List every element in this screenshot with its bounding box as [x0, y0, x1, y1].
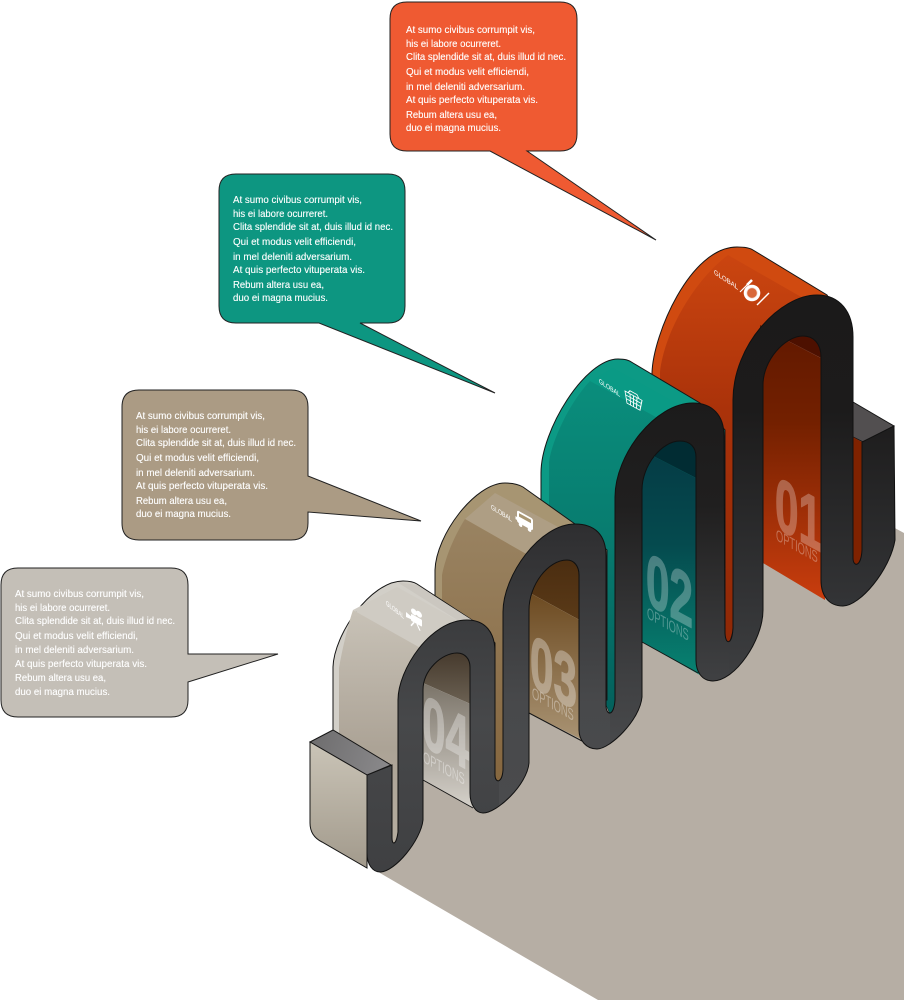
arch 01 options label: OPTIONS: [776, 526, 818, 567]
callout text: duo ei magna mucius.: [15, 686, 110, 698]
icon: bus: [516, 509, 533, 534]
callout shape: [122, 390, 421, 540]
start block top face: [310, 730, 391, 775]
arch 04 grey: [333, 581, 495, 848]
callout text: Rebum altera usu ea,: [15, 672, 106, 684]
arch 01 main surface: [660, 255, 803, 650]
arch 04 highlight band: [353, 587, 462, 655]
callout text: At sumo civibus corrumpit vis,: [15, 588, 144, 600]
callout text: At quis perfecto vituperata vis.: [233, 264, 365, 276]
callout text: At sumo civibus corrumpit vis,: [406, 24, 535, 36]
arch 02 teal: [541, 359, 725, 718]
arch 04 main surface: [339, 610, 433, 848]
callout text: Clita splendide sit at, duis illud id nec.: [136, 437, 296, 449]
callout text: in mel deleniti adversarium.: [136, 467, 255, 479]
arch 03 silhouette: [435, 483, 607, 790]
callout text: Rebum altera usu ea,: [233, 279, 324, 291]
arch 02 inner wall: [640, 449, 700, 675]
callout text: Rebum altera usu ea,: [136, 495, 227, 507]
callout text: Clita splendide sit at, duis illud id nec.: [15, 615, 175, 627]
arch 02 silhouette: [541, 359, 725, 718]
callout: 04 grey: [1, 568, 278, 717]
arch 01 red: [652, 247, 862, 650]
callout text: duo ei magna mucius.: [136, 508, 231, 520]
callout text: in mel deleniti adversarium.: [406, 81, 525, 93]
callout text: Qui et modus velit efficiendi,: [233, 236, 356, 248]
callout text: in mel deleniti adversarium.: [15, 644, 134, 656]
arch 03 inner wall: [527, 592, 585, 741]
callout shape: [390, 2, 656, 240]
callout text: At quis perfecto vituperata vis.: [406, 94, 538, 106]
arch 04 ground edge: [423, 780, 473, 808]
arch 03 highlight band: [465, 493, 560, 559]
arch 04 silhouette: [333, 581, 495, 848]
arch 03 global label: GLOBAL: [491, 504, 512, 524]
start block: [310, 730, 391, 868]
callout text: Clita splendide sit at, duis illud id nec.: [233, 221, 393, 233]
arch 04 global label: GLOBAL: [386, 600, 404, 621]
arch 02 number: 02: [646, 538, 693, 645]
callout: 01 red: [390, 2, 656, 240]
callout text: At sumo civibus corrumpit vis,: [136, 410, 265, 422]
arch 02 inner ceiling: [640, 438, 700, 480]
callout shape: [219, 174, 495, 393]
callout text: his ei labore ocurreret.: [15, 602, 110, 614]
arch 02 options label: OPTIONS: [647, 604, 689, 645]
end block top face (01): [853, 402, 894, 442]
callout text: [406, 24, 566, 134]
callout text: duo ei magna mucius.: [233, 292, 328, 304]
arch 02 ground edge: [642, 642, 698, 673]
start block front face: [310, 742, 367, 868]
arch 02 global label: GLOBAL: [599, 378, 620, 399]
callout text: Rebum altera usu ea,: [406, 109, 497, 121]
arch 03 number: 03: [530, 620, 577, 727]
callout text: duo ei magna mucius.: [406, 122, 501, 134]
arch 01 number: 01: [775, 462, 822, 569]
arch 01 inner ceiling: [786, 330, 825, 360]
callout text: in mel deleniti adversarium.: [233, 251, 352, 263]
ground shadow: [375, 520, 904, 1000]
arch 01 silhouette: [652, 247, 862, 650]
callout text: Clita splendide sit at, duis illud id nec.: [406, 51, 566, 63]
arch 01 inner wall: [760, 325, 825, 600]
arch 04 number: 04: [422, 680, 469, 787]
callout text: his ei labore ocurreret.: [406, 38, 501, 50]
arch 02 main surface: [549, 381, 665, 718]
continuous black ribbon front face: [367, 295, 895, 872]
arch 03 ground edge: [529, 713, 582, 741]
callout text: his ei labore ocurreret.: [233, 208, 328, 220]
callout text: [136, 410, 296, 520]
callout text: [15, 588, 175, 698]
arch 03 inner ceiling: [527, 555, 585, 623]
arch 03 options label: OPTIONS: [532, 684, 574, 725]
icon: plate and cutlery: [740, 280, 769, 305]
arch 01 global label: GLOBAL: [714, 268, 738, 292]
callout text: At quis perfecto vituperata vis.: [15, 658, 147, 670]
callout text: Qui et modus velit efficiendi,: [136, 452, 259, 464]
callout text: Qui et modus velit efficiendi,: [15, 630, 138, 642]
callout text: [233, 194, 393, 304]
callout: 02 teal: [219, 174, 495, 393]
callout: 03 tan: [122, 390, 421, 540]
arch 03 main surface: [442, 519, 535, 790]
arch 04 options label: OPTIONS: [423, 748, 465, 789]
callout text: his ei labore ocurreret.: [136, 424, 231, 436]
arch 04 inner wall: [420, 681, 475, 809]
arch 04 inner ceiling: [420, 652, 475, 706]
icon: basket: [625, 388, 642, 411]
callout text: At sumo civibus corrumpit vis,: [233, 194, 362, 206]
arch 01 right slot: [850, 437, 862, 570]
arch 03 brown: [435, 483, 607, 790]
callout text: At quis perfecto vituperata vis.: [136, 480, 268, 492]
callout text: Qui et modus velit efficiendi,: [406, 66, 529, 78]
callout shape: [1, 568, 278, 717]
arch 04 top zone: [397, 582, 472, 623]
icon: film camera: [406, 604, 422, 632]
arch 02 highlight band: [590, 368, 685, 422]
